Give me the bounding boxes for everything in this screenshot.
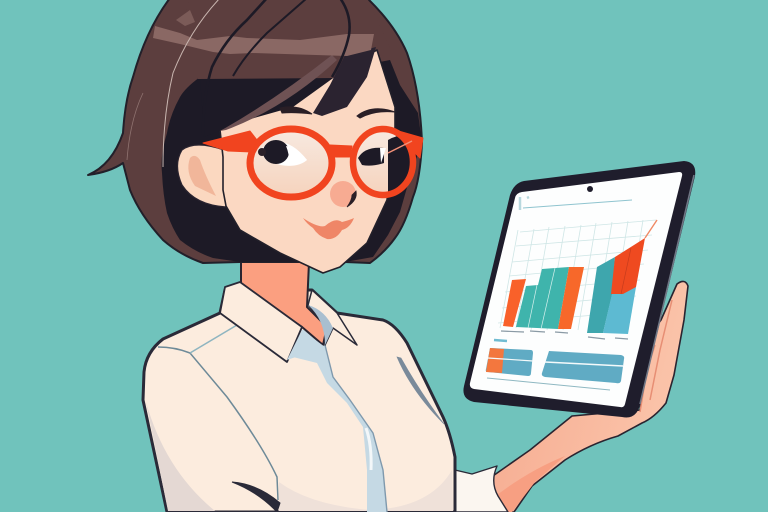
- camera: [587, 186, 593, 192]
- hair fringe: [127, 0, 390, 167]
- lower shirt shadow: [279, 470, 453, 511]
- dark fringe underside: [200, 76, 336, 137]
- hair dark underside: [162, 60, 422, 262]
- mouth: [303, 218, 354, 239]
- sleeve seams: [158, 347, 278, 500]
- arm and hand: [490, 281, 688, 512]
- strand lines: [203, 0, 267, 135]
- sleeve shadow: [146, 402, 215, 511]
- chart grid: [498, 220, 656, 332]
- tablet: [463, 161, 695, 418]
- bar chart: [501, 220, 657, 339]
- blue placket: [293, 328, 387, 512]
- collar: [220, 282, 357, 362]
- eyebrows: [280, 107, 395, 118]
- neck: [241, 225, 327, 345]
- ear: [178, 145, 226, 207]
- orange glasses frame: [203, 129, 423, 197]
- shirt cuff: [452, 466, 508, 512]
- tablet body: [463, 161, 695, 418]
- shine band: [153, 26, 374, 56]
- face: [220, 50, 395, 273]
- tablet screen: [470, 172, 682, 407]
- screen header: [520, 197, 632, 210]
- brown fringe: [180, 0, 390, 79]
- glasses lenses: [251, 130, 412, 196]
- nose: [330, 181, 356, 207]
- left eye: [258, 140, 307, 166]
- bottom panels: [486, 340, 624, 390]
- shirt body: [143, 290, 455, 512]
- right eye: [358, 148, 386, 166]
- right fringe wedge: [313, 47, 376, 116]
- hair back: [88, 0, 422, 263]
- light strand: [220, 55, 337, 131]
